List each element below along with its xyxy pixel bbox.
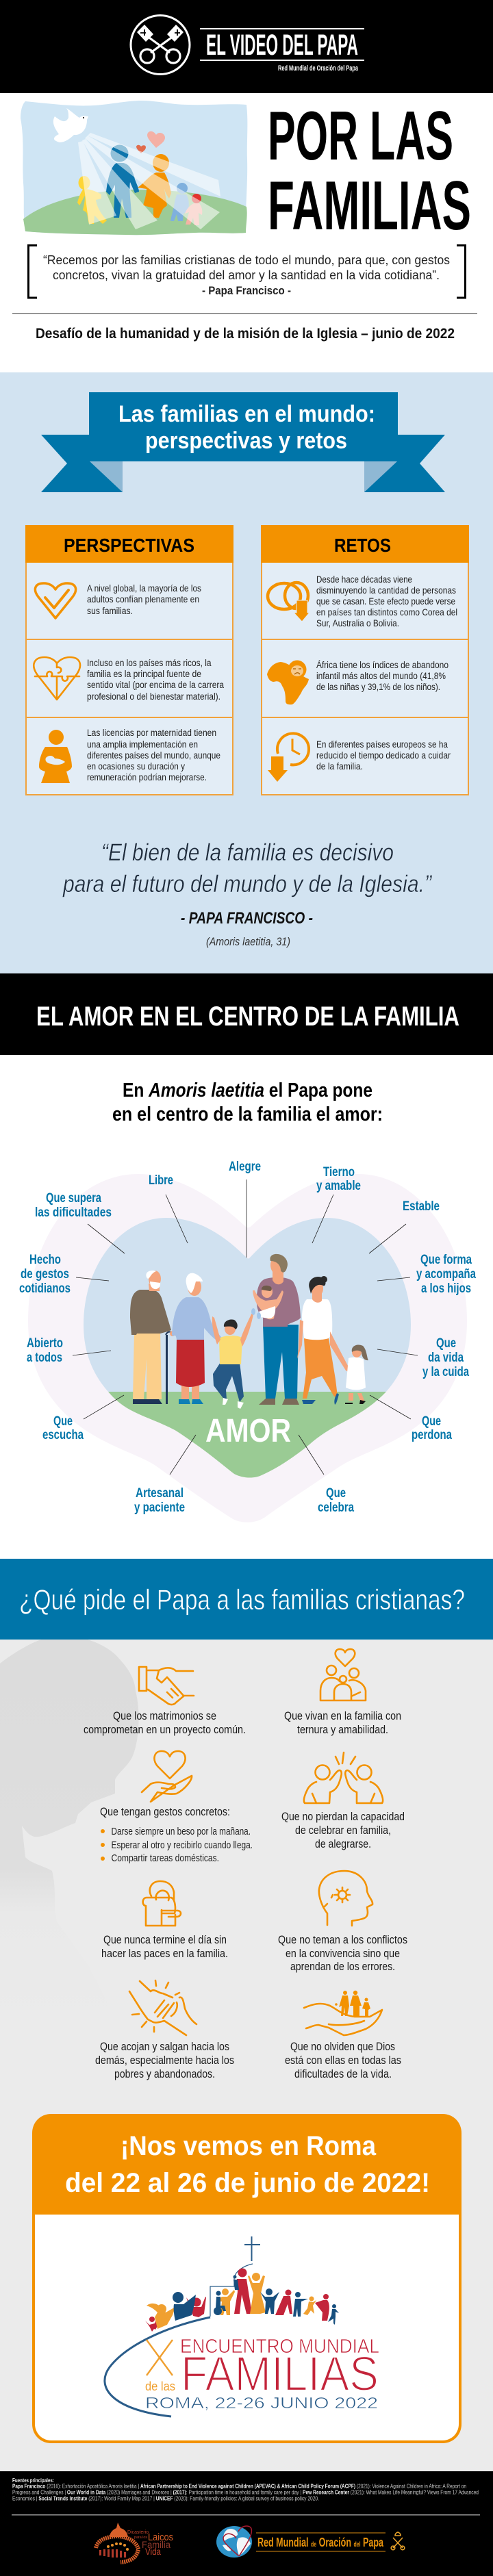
subtitle: Desafío de la humanidad y de la misión de la Iglesia – junio de 2022 (36, 326, 455, 342)
text: source of meaning: Incluso en los países más ricos, la (87, 658, 212, 668)
item: celebrate: de alegrarse. (315, 1837, 371, 1850)
panel: perspectivas (25, 525, 233, 795)
icon: handshake (139, 1667, 194, 1705)
icon: head with gears (319, 1871, 372, 1926)
item: celebrate (281, 1752, 405, 1850)
text: less care time: de la familia. (316, 761, 363, 771)
text: adults trust family: sus familias. (87, 606, 133, 616)
title (268, 98, 471, 244)
text: maternity leave (87, 728, 220, 782)
prayer quote with brackets: “Recemos por las familias cristianas de todo el mundo, para que, con gestos (43, 253, 450, 267)
cross and church outline (105, 2236, 260, 2416)
heart labels: y amable (316, 1179, 361, 1193)
item: welcome others: Que acojan y salgan hacia los (100, 2040, 229, 2053)
icon: hearts (147, 131, 165, 148)
item: celebrate: de celebrar en familia, (295, 1824, 391, 1837)
quote: Pope Francis: (Amoris laetitia, 31) (206, 935, 290, 948)
logo: Dicasterio: Familia (142, 2539, 170, 2550)
item: shared project: Que los matrimonios se (113, 1709, 216, 1722)
item: peace (101, 1881, 228, 1960)
logo: X Encuentro Mundial de las Familias: de las (145, 2380, 175, 2393)
heart labels: escucha (42, 1428, 84, 1442)
item: concrete gestures: Que tengan gestos concretos: (100, 1805, 230, 1818)
item: shared project: comprometan en un proyecto común. (84, 1723, 246, 1736)
bullet list: Compartir tareas domésticas. (111, 1852, 219, 1864)
father with baby (251, 1254, 301, 1405)
heading band: qué pide el Papa (0, 1559, 493, 1640)
heart labels: Artesanal (136, 1486, 184, 1501)
intro text (112, 1080, 383, 1125)
icon: mother with baby (39, 730, 72, 783)
prayer quote with brackets: concretos, vivan la gratuidad del amor y la santidad en la vida cotidiana”. (53, 268, 440, 282)
quote: Pope Francis: para el futuro del mundo y de la Iglesia.” (62, 871, 432, 897)
item: celebrate: Que no pierdan la capacidad (281, 1810, 405, 1823)
heart labels: las dificultades (35, 1206, 112, 1220)
heart labels: Abierto (27, 1336, 63, 1351)
heart labels: y paciente (134, 1501, 185, 1515)
heart labels: de gestos (21, 1267, 69, 1281)
grandmother (172, 1273, 223, 1404)
sources (12, 2477, 479, 2501)
text: less care time: En diferentes países europeos se ha (316, 739, 448, 750)
icon: family with heart (320, 1649, 366, 1700)
heart labels: cotidianos (19, 1281, 71, 1296)
item: conflicts: Que no teman a los conflictos (278, 1933, 407, 1946)
text: fewer marriages: en países tan distintos como Corea del (316, 607, 457, 617)
icon: Africa with sad child (267, 660, 309, 704)
text: adults trust family (87, 583, 201, 616)
item: tenderness (284, 1649, 401, 1736)
item: tenderness: Que vivan en la familia con (284, 1709, 401, 1722)
logo: X Encuentro Mundial de las Familias: FAMILIAS (181, 2347, 379, 2401)
heart labels: Que (436, 1336, 456, 1351)
item: concrete gestures (100, 1751, 253, 1864)
X mark (147, 2340, 173, 2375)
item: welcome others: demás, especialmente hacia los (95, 2054, 234, 2067)
item: peace: Que nunca termine el día sin (103, 1933, 227, 1946)
text: fewer marriages: Sur, Australia o Bolivia. (316, 618, 399, 628)
sources: Fuentes principales: (12, 2477, 54, 2484)
sources: Papa Francisco (2016): Exhortación Apostólica Amoris laetitia | African Partnership to End Violence against Children (APEVAC) & African Child Policy Forum (ACPF) (2021): Violence Against Children in Africa: A Report on (12, 2482, 466, 2489)
icon: rings with down arrow (268, 583, 309, 622)
icon: clock with down arrow (268, 733, 309, 782)
AMOR label: AMOR (205, 1413, 291, 1449)
text: fewer marriages: Desde hace décadas viene (316, 574, 412, 585)
label lines (73, 1179, 418, 1475)
text: child abandonment: África tiene los índices de abandono (316, 660, 448, 670)
heading band: el amor en el centro (0, 973, 493, 1055)
item: tenderness: ternura y amabilidad. (297, 1723, 388, 1736)
heart labels: Estable (403, 1199, 440, 1214)
text: adults trust family: A nivel global, la mayoría de los (87, 583, 201, 594)
text: fewer marriages (316, 574, 457, 628)
icon: crossed keys logo (131, 15, 190, 74)
prayer quote with brackets (29, 245, 466, 298)
header: El Video del Papa (0, 0, 493, 93)
heart labels: a los hijos (421, 1281, 471, 1296)
ribbon banner: Las familias en el mundo: (118, 401, 375, 427)
section: familias en el mundo (0, 372, 493, 973)
boy (212, 1313, 253, 1409)
text: source of meaning: sentido vital (por encima de la carrera (87, 680, 224, 690)
text: less care time (316, 739, 451, 771)
bullet list: Esperar al otro y recibirlo cuando llega. (111, 1839, 253, 1851)
text: source of meaning (87, 658, 224, 702)
section: requests to families (0, 1640, 493, 2471)
heart labels: perdona (412, 1428, 452, 1442)
quote: Pope Francis: “El bien de la familia es decisivo (101, 839, 394, 866)
heading: PERSPECTIVAS (64, 535, 194, 556)
text: child abandonment (316, 660, 448, 692)
pope silhouette (0, 1640, 139, 2013)
heading: RETOS (334, 535, 391, 556)
brand subtitle: Red Mundial de Oración del Papa (278, 64, 359, 73)
quote: Pope Francis: - PAPA FRANCISCO - (181, 909, 313, 928)
logo: Dicasterio: Vida (145, 2546, 161, 2557)
family illustration (130, 1254, 368, 1409)
text: maternity leave: una amplia implementación en (87, 739, 198, 750)
heart labels: celebra (318, 1501, 354, 1515)
heart labels: Que (53, 1414, 73, 1429)
card: Roma invitation: del 22 al 26 de junio de 2022! (65, 2168, 430, 2198)
green base (108, 1392, 386, 1478)
girl (345, 1344, 368, 1404)
outer heart (28, 1174, 467, 1522)
card: Roma invitation: ¡Nos vemos en Roma (121, 2131, 377, 2161)
heart labels (19, 1160, 476, 1515)
grandfather (130, 1271, 175, 1404)
text: source of meaning: profesional o del bienestar material). (87, 691, 220, 702)
text: less care time: reducido el tiempo dedicado a cuidar (316, 750, 451, 761)
icon: embrace (143, 1881, 181, 1926)
item: welcome others: pobres y abandonados. (114, 2067, 215, 2080)
text: child abandonment: de las niñas y 39,1% de los niños). (316, 682, 440, 692)
icon: family in hand (304, 1991, 382, 2035)
logo: Dicasterio: Laicos (148, 2532, 173, 2543)
item: shared project (84, 1667, 246, 1736)
logo: Red Mundial de Oración (216, 2526, 405, 2558)
item: God is with them: Que no olviden que Dios (290, 2040, 395, 2053)
logo: Red Mundial de Oración: Red Mundial de Oración del Papa (257, 2536, 384, 2549)
text: source of meaning: familia es la principal fuente de (87, 669, 201, 679)
heart labels: a todos (27, 1351, 62, 1365)
text: maternity leave: remuneración podrían mejorarse. (87, 772, 207, 782)
item: God is with them: está con ellas en todas las (285, 2054, 401, 2067)
heart labels: Que supera (46, 1191, 101, 1206)
heart labels: Que (326, 1486, 346, 1501)
logo: X Encuentro Mundial de las Familias (105, 2236, 379, 2416)
intro text: en el centro de la familia el amor: (112, 1104, 383, 1125)
icon: heart with check (35, 583, 76, 618)
heart labels: Tierno (323, 1165, 355, 1179)
heart labels: y la cuida (422, 1365, 469, 1379)
icon: high five (304, 1752, 383, 1803)
ribbon banner: perspectivas y retos (145, 428, 347, 454)
inner heart (84, 1218, 411, 1392)
brand lines (200, 29, 364, 60)
text: fewer marriages: que se casan. Este efecto puede verse (316, 596, 455, 607)
intro text: En Amoris laetitia el Papa pone (123, 1080, 372, 1101)
figures (77, 145, 202, 225)
quote: Pope Francis (62, 839, 432, 948)
mother (297, 1276, 349, 1405)
logo: X Encuentro Mundial de las Familias: ENCUENTRO MUNDIAL (180, 2336, 379, 2358)
sources: Economies | Social Trends Institute (2017): World Family Map 2017 | UNICEF (2020): Family-friendly policies: A global survey of business policy 2020. (12, 2495, 319, 2501)
icon: puzzle heart (34, 657, 80, 700)
heart diagram (19, 1160, 476, 1522)
text: child abandonment: infantil más altos del mundo (41,8% (316, 671, 446, 681)
heart labels: Que (422, 1414, 441, 1429)
brand name: EL VIDEO DEL PAPA (206, 29, 358, 62)
hero illustration: family under dove (21, 101, 247, 235)
heart labels: Alegre (229, 1160, 261, 1174)
text: maternity leave: diferentes países del mundo, aunque (87, 750, 220, 761)
text: maternity leave: Las licencias por maternidad tienen (87, 728, 216, 738)
logo: Dicasterio: Dicasterio (127, 2530, 149, 2535)
heart labels: Libre (149, 1173, 173, 1188)
text: fewer marriages: disminuyendo la cantidad de personas (316, 585, 456, 596)
panel: retos (261, 525, 469, 795)
item: welcome others (95, 1980, 234, 2080)
people group (145, 2269, 339, 2332)
heart labels: da vida (428, 1351, 464, 1365)
logo: Dicasterio: para los (134, 2536, 147, 2540)
icon: heart on hand (142, 1751, 192, 1802)
item: conflicts (278, 1871, 407, 1973)
bullet list: Darse siempre un beso por la mañana. (111, 1826, 251, 1837)
text: adults trust family: adultos confían plenamente en (87, 594, 199, 604)
bullet list (101, 1826, 253, 1864)
item: conflicts: en la convivencia sino que (286, 1947, 400, 1960)
footer (0, 2471, 493, 2576)
heart labels: Que forma (420, 1253, 472, 1267)
item: peace: hacer las paces en la familia. (101, 1947, 228, 1960)
heart labels: y acompaña (416, 1267, 476, 1281)
item: God is with them (285, 1991, 401, 2080)
item: conflicts: aprendan de los errores. (290, 1960, 395, 1973)
icon: keys (391, 2532, 405, 2550)
logo: X Encuentro Mundial de las Familias: ROMA, 22-26 JUNIO 2022 (145, 2394, 378, 2412)
heart labels: Hecho (29, 1253, 61, 1267)
logo: Dicasterio (96, 2523, 173, 2562)
card: Roma invitation (32, 2114, 462, 2443)
icon: helping hands (129, 1980, 197, 2035)
light rays (78, 133, 220, 229)
text: maternity leave: en ocasiones su duración y (87, 761, 185, 771)
prayer quote with brackets: - Papa Francisco - (202, 284, 291, 297)
icon: dove (53, 108, 88, 142)
item: God is with them: dificultades de la vida. (294, 2067, 392, 2080)
ribbon banner (41, 392, 445, 492)
